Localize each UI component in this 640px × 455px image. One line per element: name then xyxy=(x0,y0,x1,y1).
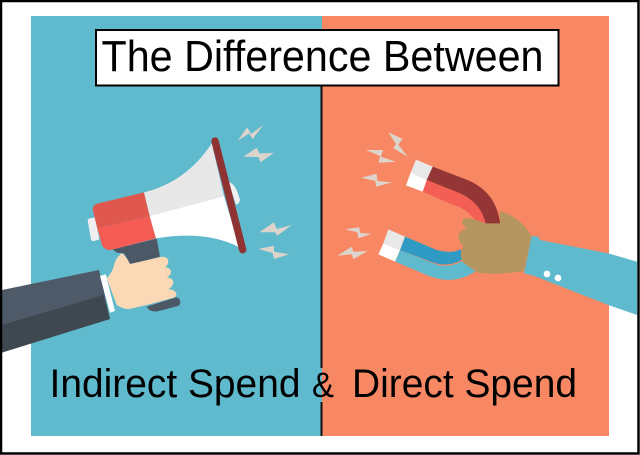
title box: The Difference Between xyxy=(102,33,544,81)
label: ampersand: & xyxy=(312,366,334,405)
icon: attraction bolts xyxy=(337,132,408,259)
icon: sound bolts xyxy=(238,125,292,259)
icon: magnet xyxy=(378,160,500,280)
icon: suit sleeve xyxy=(2,270,110,353)
icon: hand xyxy=(107,253,176,309)
icon: fist xyxy=(459,211,532,274)
icon: shirt cuff xyxy=(100,274,115,313)
panel: direct spend background xyxy=(322,16,609,436)
label: indirect spend: Indirect Spend xyxy=(50,362,300,406)
icon: blue sleeve xyxy=(524,236,637,315)
icon: megaphone xyxy=(88,141,243,311)
illustration: hand holding magnet xyxy=(378,160,637,315)
label: direct spend: Direct Spend xyxy=(352,362,577,406)
panel: indirect spend background xyxy=(31,16,322,436)
illustration: hand holding megaphone xyxy=(2,141,243,353)
